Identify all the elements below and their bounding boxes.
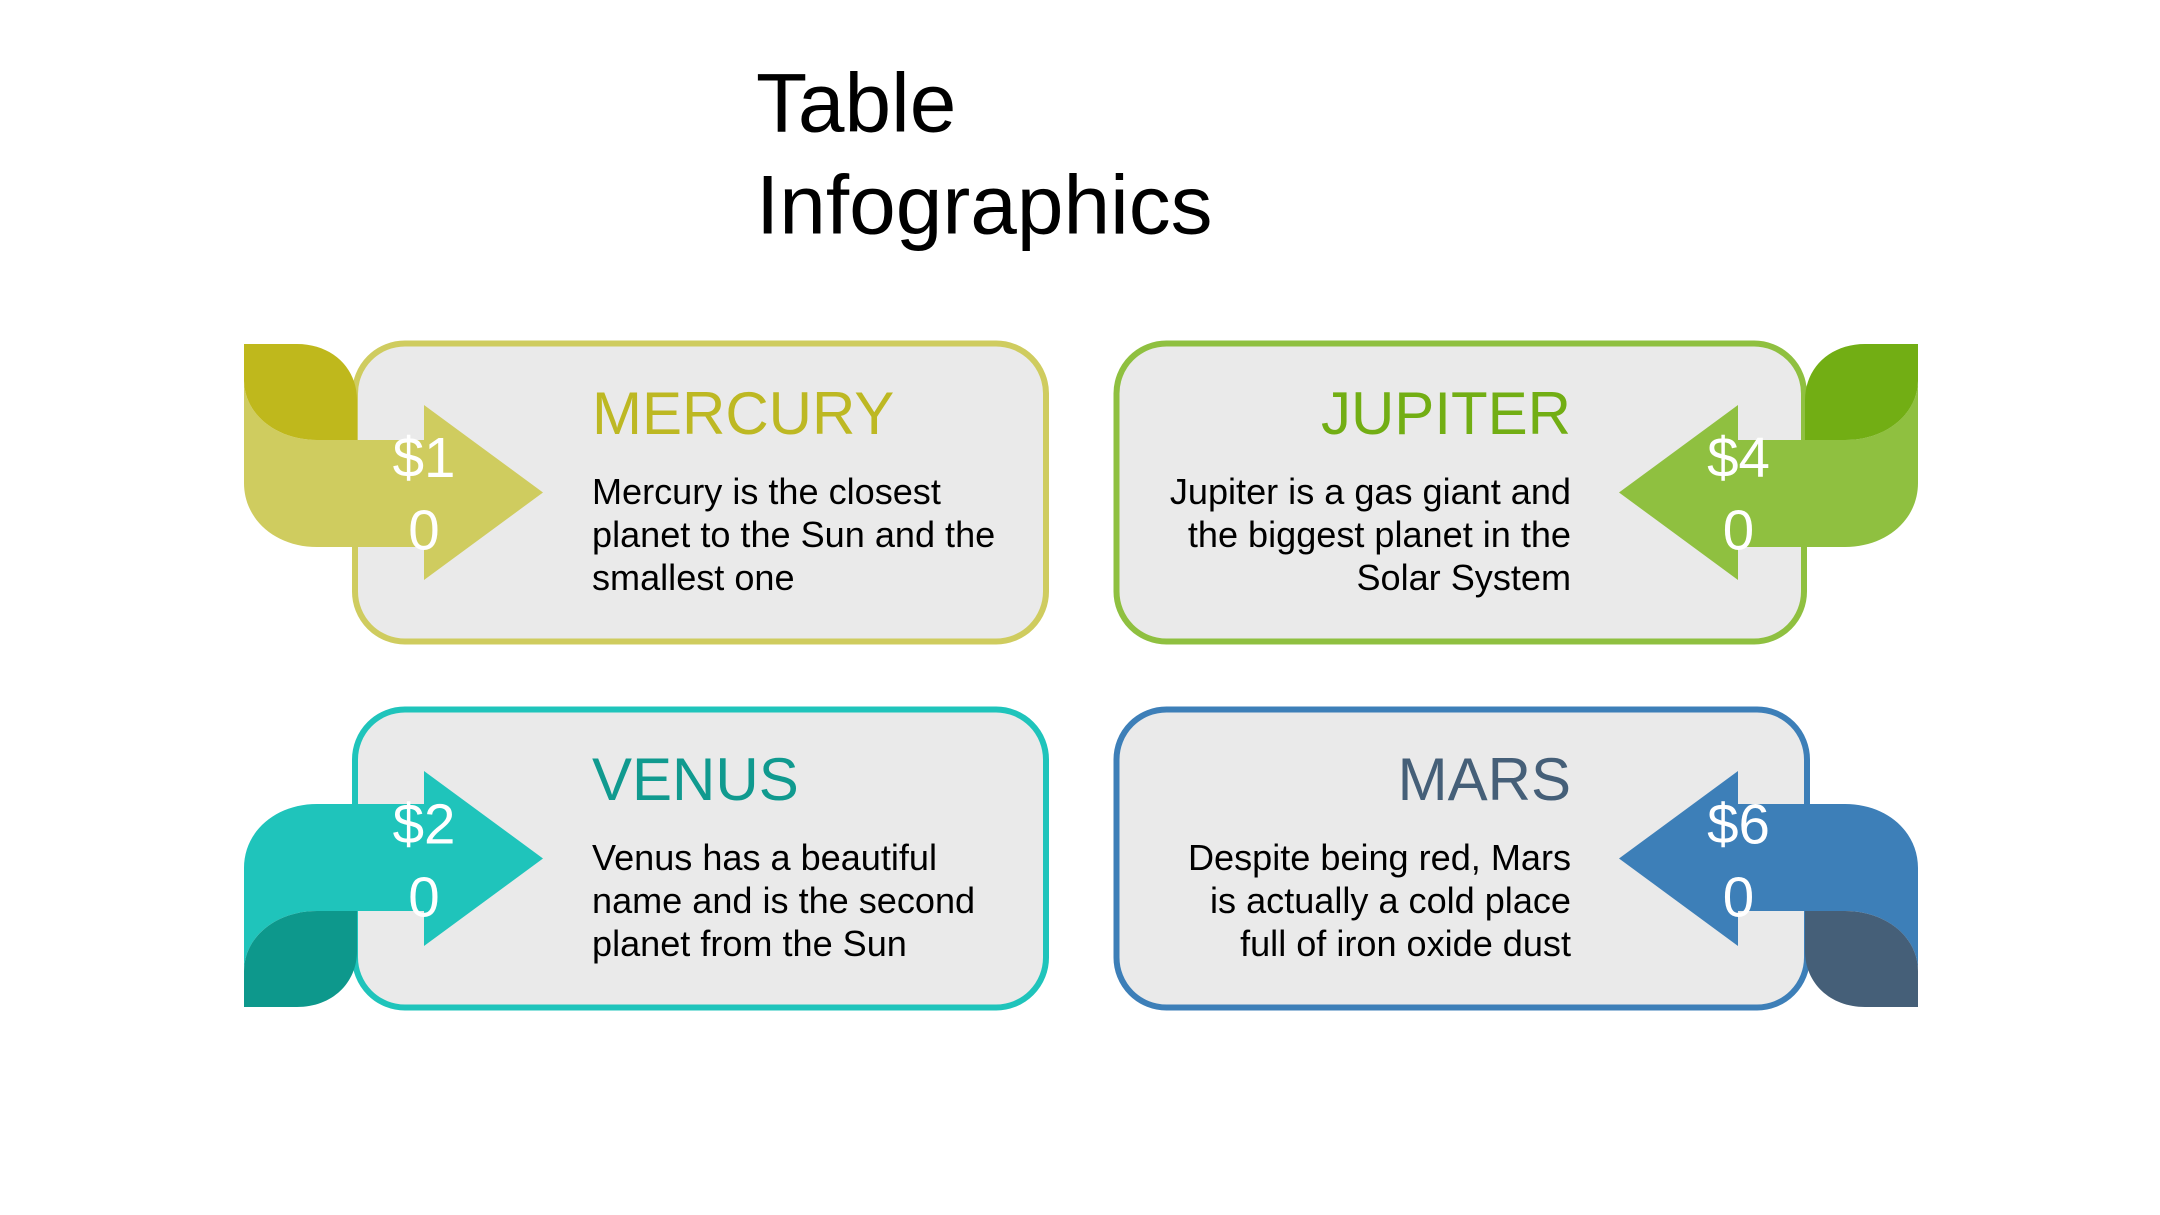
heading: mercury: MERCURY bbox=[592, 380, 894, 447]
card: venus bbox=[355, 710, 1046, 1008]
price: jupiter: 0 bbox=[1723, 498, 1754, 562]
text: venus description: Venus has a beautiful bbox=[592, 837, 937, 878]
text: mars description: full of iron oxide dust bbox=[1240, 923, 1571, 964]
price: mercury: $1 bbox=[393, 426, 455, 489]
panel: venus bbox=[244, 710, 1046, 1008]
text: jupiter description: the biggest planet in the bbox=[1188, 514, 1571, 555]
title: Table bbox=[756, 56, 956, 150]
heading: venus: VENUS bbox=[592, 746, 799, 813]
text: venus description: name and is the second bbox=[592, 880, 975, 921]
text: mercury description: Mercury is the closest bbox=[592, 471, 941, 512]
panel: mars bbox=[1116, 710, 1918, 1008]
panel: jupiter bbox=[1116, 344, 1918, 642]
panel: mercury bbox=[244, 344, 1046, 642]
text: mercury description: planet to the Sun and the bbox=[592, 514, 995, 555]
text: mercury description: smallest one bbox=[592, 557, 795, 598]
price: mercury: 0 bbox=[408, 498, 440, 562]
icon: jupiter ribbon arrow bbox=[1619, 344, 1918, 580]
card: mercury bbox=[355, 344, 1046, 642]
title: Infographics bbox=[756, 158, 1213, 252]
text: mars description: is actually a cold place bbox=[1210, 880, 1571, 921]
price: mars: $6 bbox=[1707, 792, 1770, 856]
icon: venus ribbon arrow bbox=[244, 771, 543, 1007]
icon: mars ribbon arrow bbox=[1619, 771, 1918, 1007]
text: mars description: Despite being red, Mars bbox=[1188, 837, 1571, 878]
price: venus: $2 bbox=[393, 792, 455, 856]
heading: mars: MARS bbox=[1398, 746, 1571, 813]
text: jupiter description: Solar System bbox=[1356, 557, 1571, 598]
title bbox=[756, 56, 1213, 252]
price: jupiter: $4 bbox=[1707, 426, 1770, 489]
card: mars bbox=[1116, 710, 1807, 1008]
text: jupiter description: Jupiter is a gas giant and bbox=[1170, 471, 1571, 512]
heading: jupiter: JUPITER bbox=[1321, 380, 1571, 447]
card: jupiter bbox=[1116, 344, 1804, 642]
text: venus description: planet from the Sun bbox=[592, 923, 907, 964]
price: venus: 0 bbox=[408, 866, 440, 928]
price: mars: 0 bbox=[1723, 866, 1754, 928]
icon: mercury ribbon arrow bbox=[244, 344, 543, 580]
